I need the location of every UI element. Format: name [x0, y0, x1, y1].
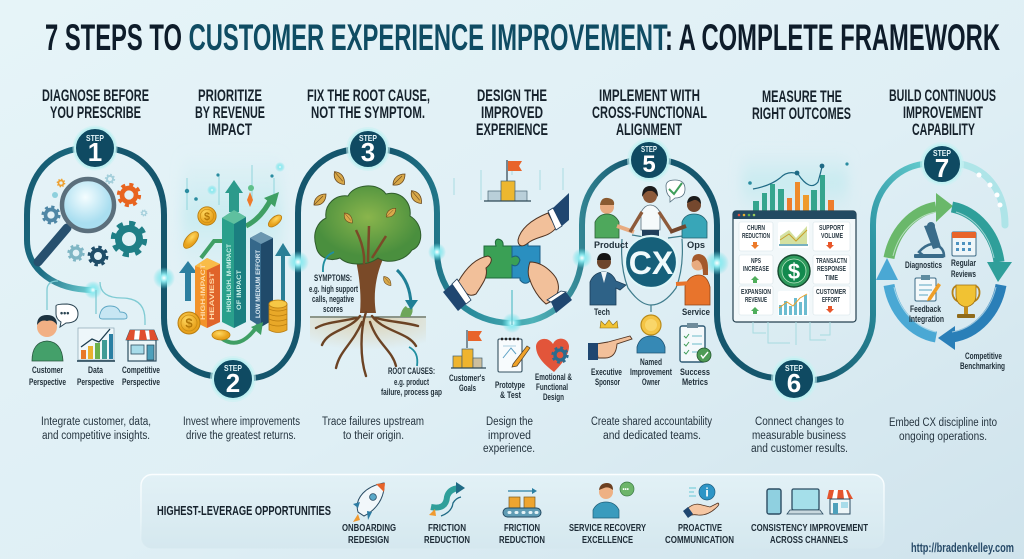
description: step 1: Integrate customer, data, [41, 416, 151, 428]
heading: step 5: ALIGNMENT [616, 121, 682, 139]
illustration: cross-functional team around CX [590, 180, 710, 312]
heading: step 1 [42, 87, 149, 122]
label: competitive perspective: Perspective [122, 377, 160, 388]
step badge 7 [920, 142, 964, 186]
kpi card: nps increase [739, 255, 773, 284]
heading: step 7 [889, 87, 996, 139]
heading: step 3 [307, 87, 430, 122]
icon: prototype and test [498, 339, 530, 372]
step badge 2 [210, 356, 256, 402]
label: symptoms: e.g. high support [309, 284, 359, 295]
label: customer's goals: Goals [459, 383, 476, 394]
labels: functions [594, 240, 710, 318]
heading: step 5 [592, 87, 707, 139]
heading: step 7: IMPROVEMENT [903, 104, 983, 122]
item: friction reduction conveyor [499, 488, 545, 546]
step badge 1: 1 [88, 137, 102, 167]
cycle arrows [876, 193, 1012, 350]
step badge 3 [346, 127, 390, 171]
heading: step 2: BY REVENUE [195, 104, 265, 122]
heading: step 7: CAPABILITY [912, 121, 975, 139]
label: regular reviews: Regular [951, 258, 976, 269]
bar chart: 3d impact bars with arrows: HIGH-IMPACT [201, 264, 207, 320]
bar chart: 3d impact bars with arrows [179, 180, 291, 343]
icon: customer goals [451, 330, 486, 368]
label: competitive benchmarking [960, 351, 1005, 372]
heading: step 2: PRIORITIZE [198, 87, 262, 105]
label: root causes: ROOT CAUSES: [388, 366, 435, 377]
icon: trophy [952, 285, 980, 318]
labels: functions: Product [594, 240, 629, 251]
icon: microscope [914, 222, 944, 258]
kpi card: nps increase: INCREASE [743, 264, 769, 273]
label: root causes: e.g. product [394, 377, 430, 388]
label: feedback integration: Feedback [910, 304, 942, 315]
heading: step 6 [752, 88, 851, 123]
label: data perspective [77, 365, 114, 388]
description: step 5 [591, 416, 712, 442]
step badge 6: STEP [785, 363, 803, 373]
heading: step 6: RIGHT OUTCOMES [752, 105, 851, 123]
bar chart: 3d impact bars with arrows: LOW MEDIUM EFFORT [255, 250, 262, 318]
item: proactive communication: i [705, 486, 709, 500]
item: friction reduction conveyor: FRICTION [504, 522, 540, 534]
step badge 1: STEP [86, 133, 104, 143]
kpi card: transaction response time [813, 255, 850, 284]
description: step 5: Create shared accountability [591, 416, 712, 428]
step badge 1 [72, 126, 118, 170]
label: success metrics: Metrics [682, 377, 708, 388]
description: step 3: Trace failures upstream [322, 416, 424, 428]
heading: step 2 [195, 87, 265, 139]
label: success metrics: Success [680, 367, 710, 378]
heading: step 4: DESIGN THE [477, 87, 547, 105]
heading: step 4: IMPROVED [481, 104, 543, 122]
illustration: hands joining puzzle pieces [443, 193, 572, 325]
kpi card: customer effort: CUSTOMER [816, 287, 846, 296]
description: step 4: experience. [483, 443, 535, 455]
panel: step 7 continuous improvement [876, 87, 1012, 443]
description: step 2 [183, 416, 300, 442]
step badge 2: STEP [224, 363, 242, 373]
connector lines [47, 281, 145, 325]
panel: step 3 root cause [307, 87, 442, 442]
panel: step 6 measure [733, 88, 856, 455]
kpi card: customer effort: EFFORT [822, 295, 840, 304]
heading: step 5: CROSS-FUNCTIONAL [592, 104, 707, 122]
label: customer perspective [29, 365, 66, 388]
opportunities heading: HIGHEST-LEVERAGE OPPORTUNITIES [157, 503, 331, 518]
label: competitive perspective [122, 365, 160, 388]
item: onboarding redesign: ONBOARDING [342, 522, 396, 534]
icon: goal flag on podium [484, 160, 531, 201]
kpi card: churn reduction: REDUCTION [742, 231, 770, 240]
description: step 7 [889, 417, 997, 443]
label: emotional and functional design: Emotional & [535, 372, 572, 383]
label: customer's goals: Customer's [449, 373, 485, 384]
heading: step 2: IMPACT [208, 121, 252, 139]
label: customer's goals [449, 373, 485, 394]
label: symptoms: scores [323, 304, 343, 315]
step badge 3: 3 [361, 137, 375, 167]
kpi card: expansion revenue [739, 286, 773, 315]
label: emotional and functional design: Design [543, 392, 564, 403]
heading: step 1: DIAGNOSE BEFORE [42, 87, 149, 105]
icon: emotional heart with gear [536, 339, 569, 372]
icon: success metrics clipboard [680, 323, 711, 362]
step badge 5: 5 [642, 151, 656, 178]
icon: dollar coin: $ [788, 259, 800, 284]
item: service recovery excellence: ••• [622, 487, 629, 493]
label: regular reviews [951, 258, 976, 280]
step badge 6 [771, 356, 817, 402]
heading: step 6: MEASURE THE [762, 88, 842, 106]
description: step 6 [751, 416, 848, 455]
item: consistency improvement across channels [751, 489, 868, 546]
item: friction reduction [424, 482, 470, 546]
illustration: tree with roots [310, 172, 426, 376]
panel: step 4 design [443, 87, 572, 455]
item: consistency improvement across channels: CONSISTENCY IMPROVEMENT [751, 522, 868, 534]
step badge 3: STEP [359, 133, 377, 143]
heading: step 4 [476, 87, 548, 139]
item: proactive communication [665, 484, 734, 546]
label: prototype and test: & Test [500, 390, 522, 401]
kpi card: churn reduction: CHURN [747, 223, 765, 232]
label: feedback integration: Integration [909, 314, 944, 325]
connector lines under dashboard [753, 322, 830, 345]
icon: calendar [952, 232, 976, 256]
panel: step 2 prioritize [178, 87, 300, 442]
step badge 5: STEP [641, 144, 657, 154]
label: customer perspective: Customer [32, 365, 63, 376]
panel: step 1 diagnose [29, 87, 160, 442]
labels: functions: Service [682, 307, 710, 318]
kpi card: transaction response time: RESPONSE [817, 264, 846, 273]
label: prototype and test: Prototype [495, 380, 525, 391]
description: step 3: to their origin. [343, 430, 404, 442]
heading: step 1: YOU PRESCRIBE [50, 104, 141, 122]
kpi card: support volume: VOLUME [821, 231, 843, 240]
description: step 4: improved [488, 430, 531, 442]
description: step 3 [322, 416, 424, 442]
label: symptoms: SYMPTOMS: [314, 273, 352, 284]
label: symptoms [309, 273, 359, 315]
label: executive sponsor: Executive [591, 367, 622, 378]
label: named improvement owner: Owner [642, 377, 660, 388]
item: service recovery excellence: EXCELLENCE [582, 534, 633, 546]
icon: data chart and cloud [77, 306, 127, 361]
label: executive sponsor [591, 367, 622, 388]
label: competitive perspective: Competitive [122, 365, 160, 376]
label: executive sponsor: Sponsor [595, 377, 620, 388]
description: step 6: measurable business [752, 430, 846, 442]
item: proactive communication: COMMUNICATION [665, 534, 734, 546]
description: step 6: and customer results. [751, 443, 848, 455]
mini chart: area [778, 222, 809, 248]
item: service recovery excellence [569, 482, 646, 546]
item: friction reduction conveyor: REDUCTION [499, 534, 545, 546]
description: step 2: Invest where improvements [183, 416, 300, 428]
step badge 7: STEP [933, 148, 951, 158]
item: friction reduction: FRICTION [428, 522, 466, 534]
item: proactive communication: PROACTIVE [678, 522, 722, 534]
bar chart: 3d impact bars with arrows: HEAVIEST [210, 271, 216, 320]
description: step 1 [41, 416, 151, 442]
heading: step 5: IMPLEMENT WITH [599, 87, 700, 105]
sparkles [454, 165, 563, 200]
step badge 6: 6 [787, 368, 801, 398]
description: step 4 [483, 416, 535, 455]
icon: executive sponsor [588, 320, 632, 360]
label: emotional and functional design [535, 372, 572, 403]
icon: competitive store [126, 330, 158, 361]
label: success metrics [680, 367, 710, 388]
icon: named improvement owner [637, 315, 665, 353]
item: onboarding redesign [342, 483, 396, 546]
description: step 7: Embed CX discipline into [889, 417, 997, 429]
icon: feedback clipboard [915, 275, 941, 301]
label: named improvement owner: Improvement [630, 367, 673, 378]
label: feedback integration [909, 304, 944, 325]
dashboard panel [733, 211, 856, 322]
mini chart: bars [778, 291, 809, 316]
kpi card: transaction response time: TRANSACTN [816, 256, 847, 265]
label: data perspective: Data [88, 365, 104, 376]
label: emotional and functional design: Functional [536, 382, 568, 393]
label: named improvement owner [630, 357, 673, 388]
step badge 5 [627, 138, 671, 182]
kpi card: expansion revenue: EXPANSION [741, 287, 771, 296]
label: competitive benchmarking: Competitive [965, 351, 1002, 362]
label: root causes: failure, process gap [381, 387, 442, 398]
panel: step 5 implement [588, 87, 712, 442]
icon: customer: ••• [60, 308, 69, 318]
label: regular reviews: Reviews [951, 269, 976, 280]
bar chart: 3d impact bars with arrows: OF IMPACT [237, 270, 243, 310]
description: step 1: and competitive insights. [42, 430, 150, 442]
heading: step 4: EXPERIENCE [476, 121, 548, 139]
icon: magnifier and gears [38, 175, 147, 265]
label: diagnostics: Diagnostics [905, 260, 942, 271]
label: data perspective: Perspective [77, 377, 114, 388]
haze and sparkles [182, 150, 285, 280]
kpi card: expansion revenue: REVENUE [745, 295, 767, 304]
chart: bars and trend line above dashboard [742, 150, 849, 215]
description: step 5: and dedicated teams. [603, 430, 701, 442]
label: named improvement owner: Named [640, 357, 662, 368]
item: consistency improvement across channels: ACROSS CHANNELS [770, 534, 848, 546]
item: friction reduction: REDUCTION [424, 534, 470, 546]
bar chart: 3d impact bars with arrows: HIGHLIGH. M-IMPACT [227, 244, 233, 312]
kpi card: support volume: SUPPORT [819, 223, 844, 232]
step badge 7: 7 [935, 153, 949, 183]
label: symptoms: calls, negative [312, 294, 354, 305]
description: step 4: Design the [486, 416, 533, 428]
description: step 6: Connect changes to [755, 416, 844, 428]
heading: step 3: NOT THE SYMPTOM. [311, 104, 425, 122]
illustration: cross-functional team around CX: CX [629, 245, 674, 281]
label: prototype and test [495, 380, 525, 401]
heading: step 3: FIX THE ROOT CAUSE, [307, 87, 430, 105]
serpentine path connecting steps [27, 149, 1005, 380]
icon: customer [32, 304, 78, 361]
kpi card: support volume [813, 222, 850, 251]
kpi card: transaction response time: TIME [825, 273, 838, 282]
item: service recovery excellence: SERVICE RECOVERY [569, 522, 646, 534]
label: root causes [381, 366, 442, 398]
item: onboarding redesign: REDESIGN [348, 534, 389, 546]
description: step 7: ongoing operations. [899, 431, 987, 443]
step badge 2: 2 [226, 368, 240, 398]
kpi card: customer effort [813, 286, 850, 315]
panel: highest-leverage opportunities [141, 474, 884, 548]
kpi card: nps increase: NPS [751, 256, 761, 265]
label: customer perspective: Perspective [29, 377, 66, 388]
icon: coins [178, 207, 287, 340]
labels: functions: Tech [594, 307, 610, 318]
description: step 2: drive the greatest returns. [186, 430, 296, 442]
labels: functions: Ops [687, 240, 705, 251]
kpi card: churn reduction [739, 222, 773, 251]
